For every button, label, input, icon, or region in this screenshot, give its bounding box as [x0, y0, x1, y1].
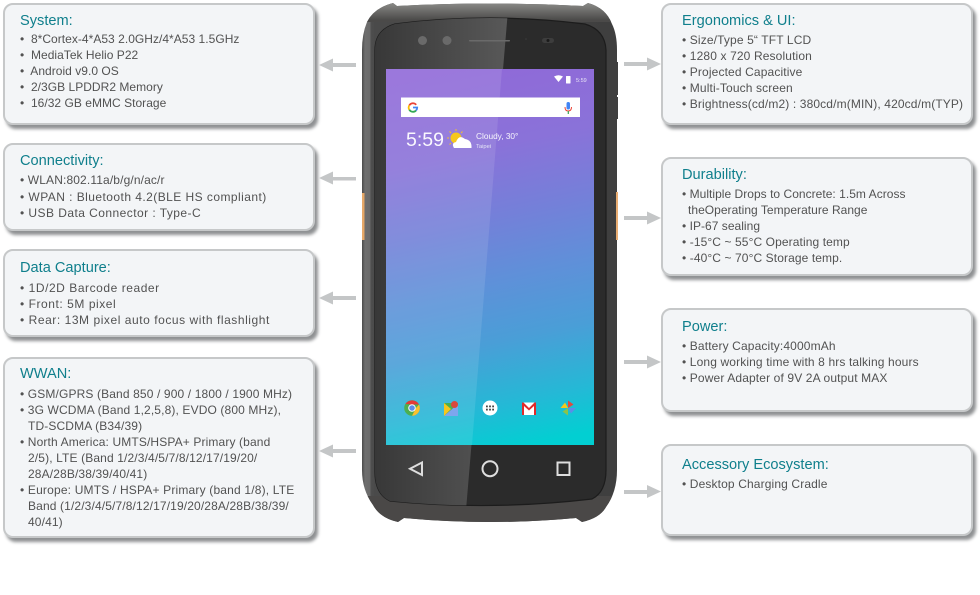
screen — [386, 69, 594, 445]
spec list: WWAN: 40/41) — [28, 515, 63, 529]
spec list: System: • MediaTek Helio P22 — [20, 48, 138, 62]
weather widget — [406, 129, 518, 151]
panel: Connectivity — [3, 143, 315, 231]
spec list: WWAN: 28A/28B/38/39/40/41) — [28, 467, 147, 481]
spec list: Durability — [682, 187, 906, 265]
spec list: System: • 2/3GB LPDDR2 Memory — [20, 80, 163, 94]
arrow: Power — [624, 356, 661, 368]
panel: System — [3, 3, 315, 125]
icon: App launcher — [482, 400, 498, 416]
spec list: Ergonomics & UI — [682, 33, 963, 111]
spec list: System: • Android v9.0 OS — [20, 64, 119, 78]
spec list: Connectivity: • USB Data Connector : Type-C — [20, 206, 201, 220]
arrow: Accessory — [624, 485, 661, 498]
phone body — [362, 0, 618, 524]
bezel reflection — [370, 10, 508, 510]
weather widget: Cloudy, 30° — [476, 131, 518, 141]
arrow: System — [319, 58, 356, 72]
spec list: Durability: • -40°C ~ 70°C Storage temp. — [682, 251, 842, 265]
status bar: 5:59 — [576, 78, 587, 84]
arrow: Durability — [624, 212, 661, 224]
spec list: Connectivity: • WLAN:802.11a/b/g/n/ac/r — [20, 173, 165, 187]
heading: Data Capture: Data Capture: — [20, 260, 111, 276]
spec list: WWAN: • North America: UMTS/HSPA+ Primary (band — [20, 435, 270, 449]
panel: Data Capture — [3, 249, 315, 337]
spec list: Data Capture — [20, 281, 270, 327]
spec list: Ergonomics & UI: • Size/Type 5“ TFT LCD — [682, 33, 811, 47]
spec list: Power: • Long working time with 8 hrs talking hours — [682, 355, 919, 369]
front cameras and earpiece — [418, 36, 554, 45]
heading: Accessory Ecosystem: Accessory Ecosystem: — [682, 457, 829, 473]
spec list: Data Capture: • Rear: 13M pixel auto focus with flashlight — [20, 313, 270, 327]
weather widget: 5:59 — [406, 129, 444, 151]
spec list: Power: • Power Adapter of 9V 2A output MAX — [682, 371, 888, 385]
spec list: WWAN: • GSM/GPRS (Band 850 / 900 / 1800 / 1900 MHz) — [20, 387, 292, 401]
icon: Maps — [444, 401, 458, 416]
front bezel — [375, 18, 606, 506]
spec list: Data Capture: • 1D/2D Barcode reader — [20, 281, 160, 295]
icon: back — [410, 462, 422, 475]
arrow: Data Capture — [319, 292, 356, 304]
arrow: Connectivity — [319, 172, 356, 184]
spec list: WWAN — [20, 387, 294, 529]
side buttons — [362, 62, 618, 240]
panel: Ergonomics & UI — [661, 3, 973, 125]
spec list: System: • 8*Cortex-4*A53 2.0GHz/4*A53 1.5GHz — [20, 32, 239, 46]
heading: System: System: — [20, 13, 73, 29]
spec list: WWAN: TD-SCDMA (B34/39) — [28, 419, 142, 433]
spec list: WWAN: Band (1/2/3/4/5/7/8/12/17/19/20/28A/28B/38/39/ — [28, 499, 289, 513]
phone — [362, 0, 618, 524]
arrow: Ergonomics — [624, 58, 661, 70]
spec list: Durability: • Multiple Drops to Concrete: 1.5m Across — [682, 187, 906, 201]
panel: WWAN — [3, 357, 315, 538]
spec list: System — [20, 32, 239, 110]
arrows and phone artwork — [320, 3, 661, 522]
panel: Accessory Ecosystem — [661, 444, 973, 536]
spec list: Durability: theOperating Temperature Range — [688, 203, 867, 217]
icon: Gmail — [522, 402, 536, 415]
heading: Power: Power: — [682, 319, 727, 335]
app dock — [404, 400, 576, 416]
heading: Ergonomics & UI: Ergonomics & UI: — [682, 13, 796, 29]
icon: Photos — [560, 400, 576, 416]
heading: Connectivity: Connectivity: — [20, 153, 104, 169]
heading: WWAN: WWAN: — [20, 366, 71, 382]
spec list: Ergonomics & UI: • 1280 x 720 Resolution — [682, 49, 812, 63]
heading: Durability: Durability: — [682, 167, 747, 183]
spec list: Durability: • -15°C ~ 55°C Operating temp — [682, 235, 850, 249]
spec list: Ergonomics & UI: • Projected Capacitive — [682, 65, 802, 79]
spec list: Ergonomics & UI: • Multi-Touch screen — [682, 81, 793, 95]
spec list: System: • 16/32 GB eMMC Storage — [20, 96, 166, 110]
spec list: WWAN: • 3G WCDMA (Band 1,2,5,8), EVDO (800 MHz), — [20, 403, 281, 417]
search bar — [401, 98, 580, 117]
panel: Power — [661, 308, 973, 412]
icon: home — [482, 461, 498, 476]
spec list: WWAN: • Europe: UMTS / HSPA+ Primary (band 1/8), LTE — [20, 483, 294, 497]
weather widget: Taipei — [476, 144, 491, 150]
spec list: WWAN: 2/5), LTE (Band 1/2/3/4/5/7/8/12/17/19/20/ — [28, 451, 257, 465]
screen reflection — [386, 69, 502, 445]
spec list: Data Capture: • Front: 5M pixel — [20, 297, 116, 311]
spec list: Accessory Ecosystem: • Desktop Charging Cradle — [682, 477, 828, 491]
spec list: Power — [682, 339, 919, 385]
icon: Chrome — [404, 400, 420, 416]
status bar — [554, 75, 587, 84]
spec list: Power: • Battery Capacity:4000mAh — [682, 339, 836, 353]
spec list: Durability: • IP-67 sealing — [682, 219, 760, 233]
navigation buttons — [410, 461, 570, 476]
spec list: Ergonomics & UI: • Brightness(cd/m2) : 380cd/m(MIN), 420cd/m(TYP) — [682, 97, 963, 111]
icon: recents — [558, 462, 570, 475]
spec list: Connectivity: • WPAN : Bluetooth 4.2(BLE HS compliant) — [20, 190, 267, 204]
spec list: Connectivity — [20, 173, 267, 220]
panel: Durability — [661, 157, 973, 276]
arrow: WWAN — [319, 444, 356, 458]
